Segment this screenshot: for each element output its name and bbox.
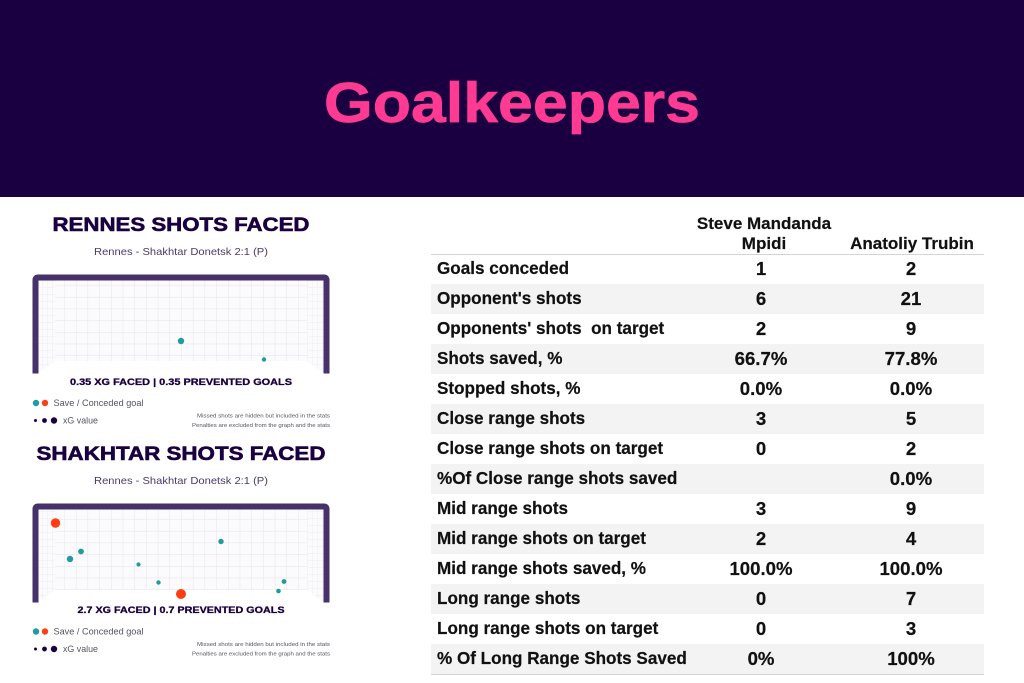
subtitle: Shakhtar: Rennes - Shakhtar Donetsk 2:1 (P) (94, 475, 268, 487)
row: long range shots on target: 0 (756, 618, 766, 639)
row: long range shots on target: 3 (906, 618, 916, 639)
row: stopped shots: Stopped shots, % (437, 379, 580, 398)
column header: Steve Mandanda Mpidi (697, 214, 832, 253)
row: mid range shots saved: 100.0% (729, 558, 793, 579)
goal frame: Rennes (36, 278, 326, 374)
row: long range shots: 0 (756, 588, 766, 609)
row: mid range shots on target (431, 524, 984, 554)
row: stopped shots: 0.0% (740, 378, 782, 399)
row: long range shots saved: 0% (748, 648, 774, 669)
bottom rule (431, 674, 984, 675)
legend: Rennes: Save / Conceded goal (54, 398, 144, 408)
row: mid range shots on target: 2 (756, 528, 766, 549)
row: shots saved: 77.8% (885, 348, 937, 369)
row: opponent's shots: Opponent's shots (437, 289, 582, 308)
row: goals conceded (437, 258, 916, 279)
goal frame: Shakhtar (36, 506, 326, 603)
row: long range shots saved (431, 644, 984, 674)
row: long range shots: 7 (906, 588, 916, 609)
footnote: Shakhtar: Penalties are excluded from the graph and the stats (192, 652, 330, 658)
row: close range shots saved: 0.0% (890, 468, 932, 489)
row: goals conceded: Goals conceded (437, 259, 569, 278)
title: Goalkeepers (324, 71, 700, 135)
legend: Rennes: xG value (63, 416, 98, 426)
panel: Rennes shots faced (33, 215, 330, 429)
row: mid range shots: Mid range shots (437, 499, 568, 518)
footnote: Shakhtar: Missed shots are hidden but included in the stats (197, 642, 330, 648)
legend: Shakhtar (33, 626, 143, 654)
row: opponents' shots on target (437, 318, 916, 339)
row: shots saved: 66.7% (735, 348, 787, 369)
shot: save (178, 338, 184, 344)
legend: Rennes (33, 398, 143, 426)
footnote: Rennes: Penalties are excluded from the graph and the stats (192, 423, 330, 429)
row: stopped shots (437, 378, 932, 399)
footnote: Shakhtar (192, 642, 330, 658)
panel: goalkeeper stats table (431, 214, 984, 675)
row: mid range shots (437, 498, 916, 519)
header banner (0, 0, 1024, 197)
row: close range shots: 3 (756, 408, 766, 429)
row: opponents' shots on target: Opponents' shots on target (437, 319, 664, 338)
row: long range shots saved: % Of Long Range Shots Saved (437, 649, 687, 668)
row: mid range shots saved: Mid range shots saved, % (437, 559, 646, 578)
xG summary: Shakhtar: 2.7 XG FACED | 0.7 PREVENTED GOALS (78, 605, 285, 616)
panel: goal charts (32, 215, 330, 658)
row: goals conceded: 1 (756, 258, 766, 279)
shot: save (262, 357, 266, 362)
row: opponents' shots on target: 9 (906, 318, 916, 339)
row: long range shots (431, 584, 984, 614)
row: long range shots saved: 100% (887, 648, 935, 669)
row: mid range shots: 9 (906, 498, 916, 519)
shots: saves and conceded goals (51, 518, 286, 599)
row: mid range shots on target: Mid range shots on target (437, 529, 646, 548)
panel: Shakhtar shots faced (33, 444, 330, 658)
row: long range shots on target (437, 618, 916, 639)
row: mid range shots on target: 4 (906, 528, 916, 549)
row: close range shots on target (437, 438, 916, 459)
row: close range shots on target: 2 (906, 438, 916, 459)
row: goals conceded: 2 (906, 258, 916, 279)
column header: Steve Mandanda Mpidi: Mpidi (742, 234, 786, 253)
heading: Shakhtar: SHAKHTAR SHOTS FACED (36, 444, 326, 465)
header rule (431, 254, 984, 255)
legend: Shakhtar: xG value (63, 644, 98, 654)
heading: Rennes: RENNES SHOTS FACED (52, 215, 310, 236)
legend: Shakhtar: Save / Conceded goal (54, 626, 144, 636)
column header: Anatoliy Trubin: Anatoliy Trubin (850, 234, 974, 253)
row: long range shots on target: Long range shots on target (437, 619, 658, 638)
xG summary: Rennes: 0.35 XG FACED | 0.35 PREVENTED GOALS (70, 377, 293, 388)
row: shots saved: Shots saved, % (437, 349, 562, 368)
row: close range shots saved (431, 464, 984, 494)
column header: Steve Mandanda Mpidi: Steve Mandanda (697, 214, 831, 233)
row: close range shots on target: Close range shots on target (437, 439, 663, 458)
row: close range shots (431, 404, 984, 434)
row: opponent's shots (431, 284, 984, 314)
row: shots saved (431, 344, 984, 374)
row: opponent's shots: 6 (756, 288, 766, 309)
row: mid range shots saved: 100.0% (879, 558, 943, 579)
row: close range shots saved: %Of Close range shots saved (437, 469, 677, 488)
row: mid range shots: 3 (756, 498, 766, 519)
footnote: Rennes (192, 414, 330, 429)
row: opponent's shots: 21 (901, 288, 921, 309)
row: opponents' shots on target: 2 (756, 318, 766, 339)
row: mid range shots saved (437, 558, 943, 579)
footnote: Rennes: Missed shots are hidden but included in the stats (197, 414, 330, 420)
subtitle: Rennes: Rennes - Shakhtar Donetsk 2:1 (P) (94, 246, 268, 258)
row: long range shots: Long range shots (437, 589, 580, 608)
row: stopped shots: 0.0% (890, 378, 932, 399)
row: close range shots: 5 (906, 408, 916, 429)
row: close range shots on target: 0 (756, 438, 766, 459)
row: close range shots: Close range shots (437, 409, 585, 428)
